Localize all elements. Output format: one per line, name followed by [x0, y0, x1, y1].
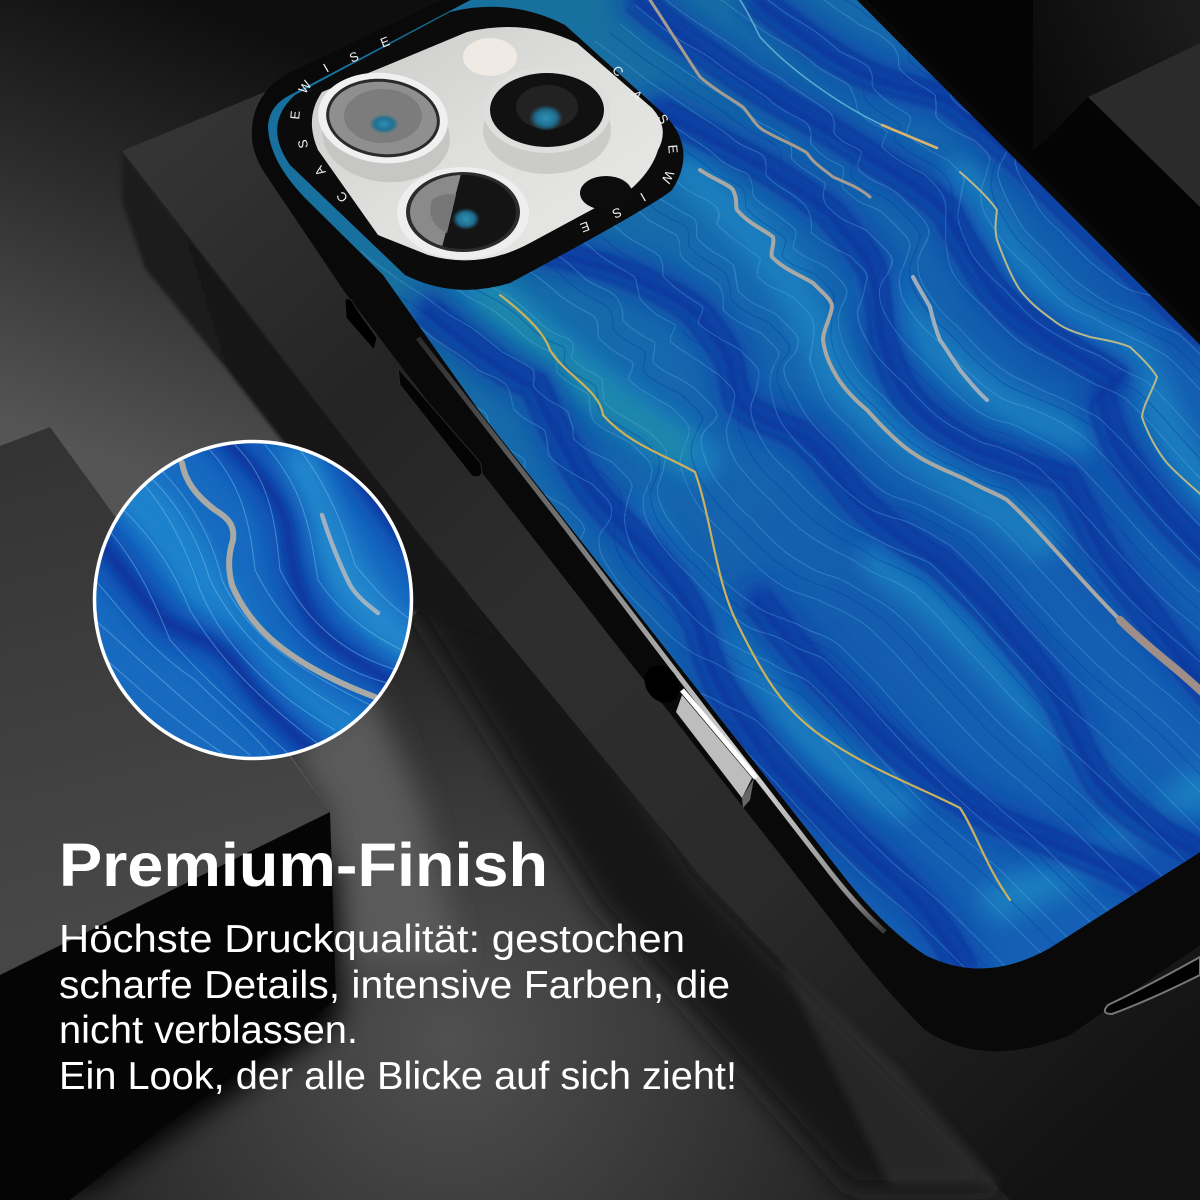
magnifier light bands	[120, 470, 410, 740]
bump black frame	[277, 7, 683, 290]
camera bump	[277, 7, 683, 290]
volume button	[398, 368, 482, 477]
magnifier fine lines	[95, 445, 412, 755]
frame lettering: E	[665, 144, 681, 154]
lens: upper left	[314, 66, 454, 188]
lit wedge	[290, 690, 460, 960]
frame lettering: A	[628, 87, 646, 103]
frame lettering	[287, 33, 681, 236]
frame lettering: S	[654, 111, 672, 127]
floor light strip below phone	[780, 960, 1000, 1185]
lens: upper right	[483, 67, 611, 174]
magnifier dark halos	[98, 443, 408, 755]
circular detail magnifier	[92, 440, 414, 760]
microphone hole	[580, 176, 632, 210]
frame lettering: C	[609, 63, 627, 79]
magnifier dark bands	[102, 444, 400, 750]
flash	[463, 38, 517, 76]
frame lettering: C	[333, 189, 351, 205]
frame lettering: E	[578, 218, 592, 236]
description text	[59, 918, 737, 1098]
description text: scharfe Details, intensive Farben, die	[59, 964, 730, 1007]
bottom speaker port	[1105, 957, 1200, 1014]
lit floor	[0, 600, 1200, 1200]
block side face	[122, 151, 500, 640]
side hole	[345, 299, 377, 350]
top right rear block	[1033, 0, 1200, 150]
frame lettering: S	[347, 48, 361, 66]
teal glow by camera	[480, 290, 690, 455]
silver side button	[676, 690, 756, 808]
frame lettering: S	[295, 138, 311, 150]
side recess	[637, 658, 687, 710]
lens: bottom	[397, 167, 529, 259]
right block top face	[1088, 43, 1200, 207]
metallic veins	[500, 0, 1200, 900]
frame lettering: E	[378, 33, 392, 51]
description text: Ein Look, der alle Blicke auf sich zieht!	[59, 1055, 737, 1098]
block side face shadow	[380, 560, 1010, 1190]
fine grain lines	[360, 0, 1200, 968]
phone case	[252, 0, 1200, 1052]
lower left shadow fade	[0, 860, 340, 1190]
top right black void	[860, 0, 1200, 360]
frame lettering: W	[658, 168, 677, 186]
frame lettering: A	[311, 163, 329, 179]
frame lettering: S	[610, 204, 624, 222]
lower left block top	[0, 427, 330, 975]
frame lettering: I	[638, 190, 648, 204]
dark band cores	[418, 0, 1200, 980]
silver camera plate	[312, 27, 663, 260]
title: Premium-Finish	[59, 831, 548, 899]
lower left black face	[0, 812, 336, 1200]
description text: nicht verblassen.	[59, 1009, 358, 1052]
frame lettering: W	[295, 77, 315, 96]
wide dark halos	[430, 0, 1200, 970]
frame lettering: I	[321, 61, 331, 75]
description text: Höchste Druckqualität: gestochen	[59, 918, 685, 961]
magnifier veins	[182, 463, 378, 697]
mid dark bands	[430, 0, 1200, 970]
soft light bands	[470, 170, 1200, 900]
case body	[252, 0, 1200, 1051]
frame lettering: E	[287, 110, 303, 120]
marble back panel	[268, 0, 1200, 968]
case rim highlight	[418, 338, 885, 932]
